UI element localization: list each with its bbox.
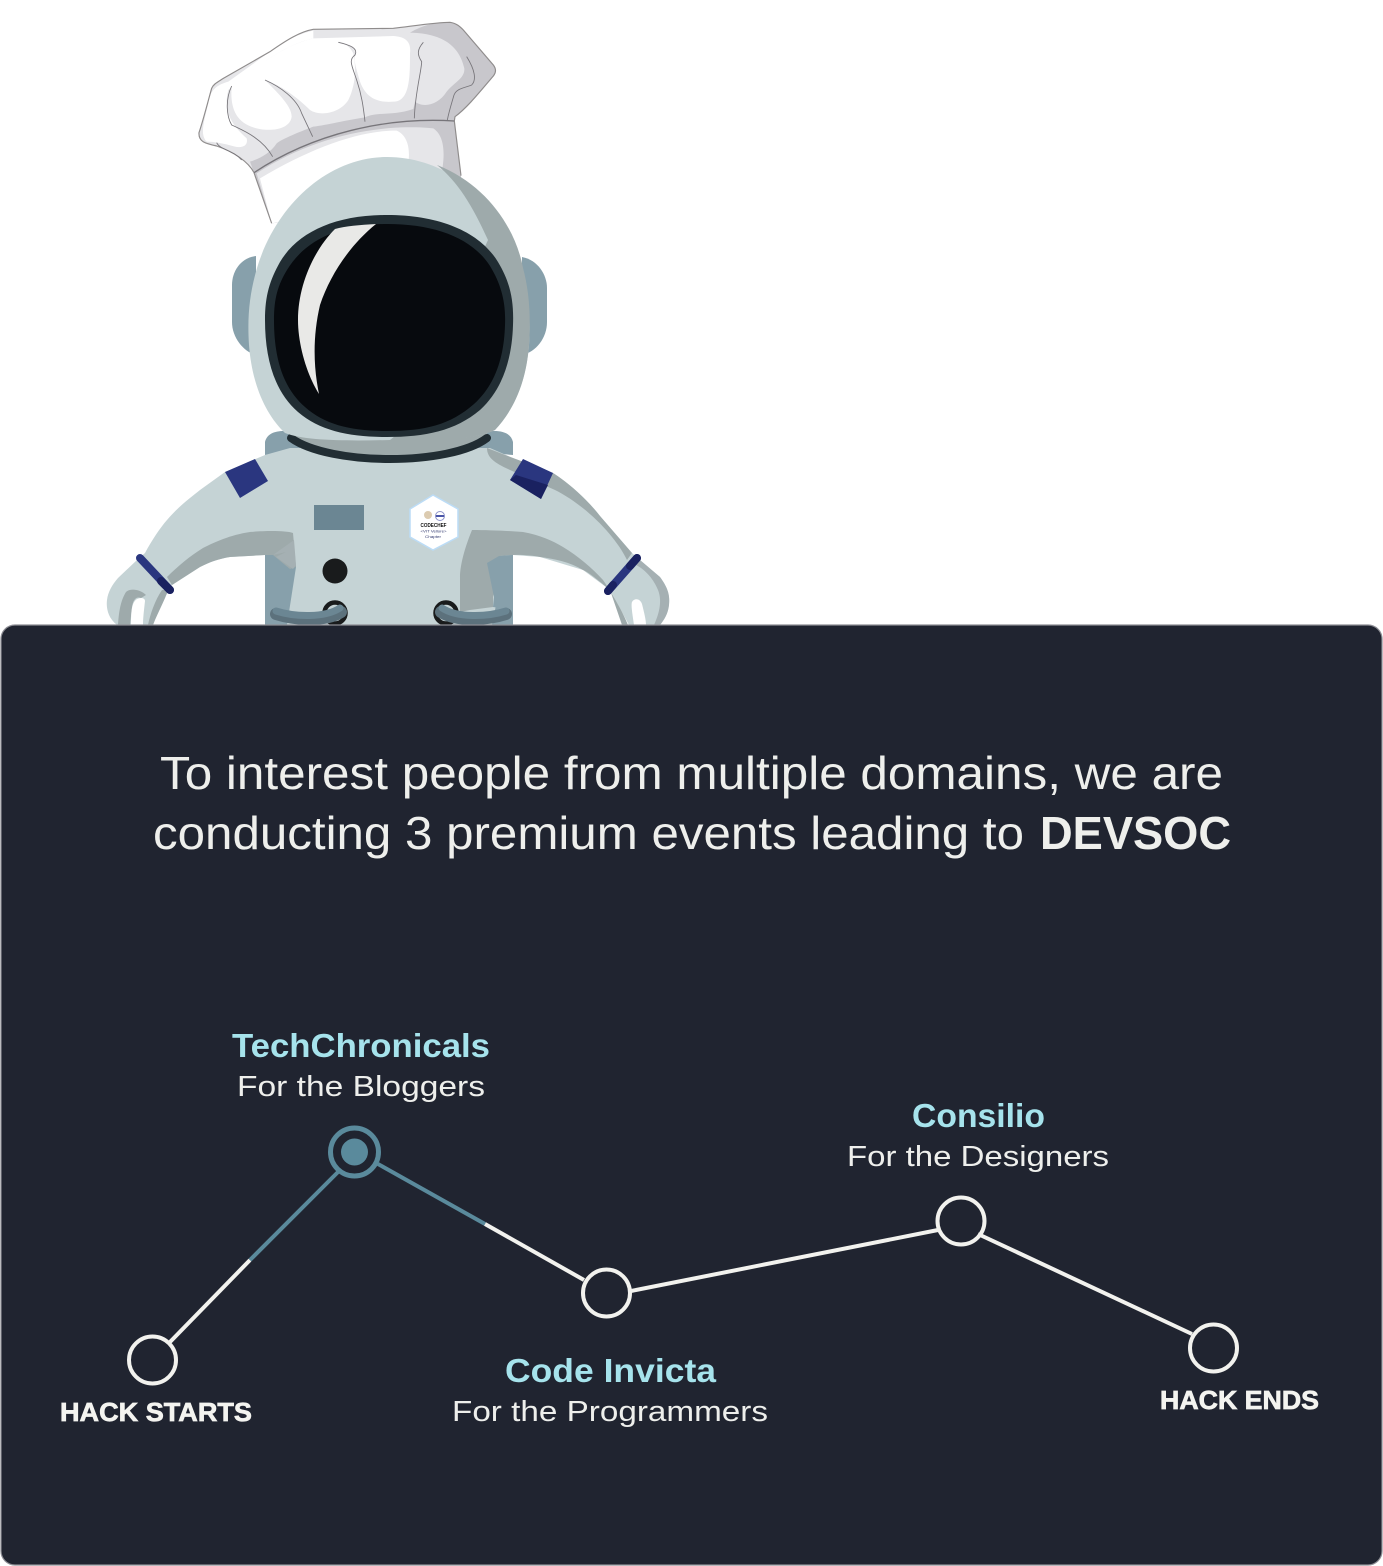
visor glass [274,224,505,431]
right arm shading [487,448,632,560]
label: Consilio: Consilio [912,1097,1045,1134]
label: Code Invicta [452,1352,768,1428]
marker: hack starts [129,1336,176,1384]
label: TechChronicals: For the Bloggers [237,1071,485,1103]
badge: CodeChef VIT Vellore chapter: CODECHEF [420,523,446,529]
right hand shading [636,560,669,625]
chest label rectangle [314,505,364,530]
badge: CodeChef VIT Vellore chapter: Chapter [425,534,442,539]
helmet shell [248,157,530,440]
chest button [322,558,348,584]
right underarm shading [460,530,628,625]
heading [153,747,1231,859]
left arm and torso [107,448,669,625]
torso side panel [265,431,513,625]
label: Code Invicta: For the Programmers [452,1396,768,1428]
label: hack starts: HACK STARTS [60,1397,252,1427]
heading: DEVSOC [1040,807,1231,859]
right suit ring [436,602,456,624]
badge: CodeChef VIT Vellore chapter: <VIT Vellore> [420,528,447,534]
timeline chart [129,1128,1237,1384]
marker: Consilio [938,1198,984,1244]
label: TechChronicals [232,1027,490,1103]
right torso fold [487,555,513,610]
helmet shading [390,165,530,440]
left hand shading [118,590,168,625]
label: hack ends: HACK ENDS [1160,1385,1319,1415]
icon: shoulder patch right [510,459,553,499]
icon: chef hat [199,22,496,223]
heading: To interest people from multiple domains, we are [160,747,1223,799]
icon: left wrist cuff [140,558,170,590]
right suit hose [441,608,506,619]
icon: shoulder patch left [225,459,268,498]
left hip fold [273,540,296,569]
icon: right wrist cuff [608,558,637,591]
marker: TechChronicals active [330,1128,378,1176]
collar [291,430,487,459]
label: Consilio: For the Designers [847,1141,1109,1173]
badge: CodeChef VIT Vellore chapter [410,495,458,550]
icon: helmet ears [232,256,547,355]
label: Code Invicta: Code Invicta [505,1352,717,1389]
marker: Code Invicta [583,1270,630,1316]
marker: hack ends [1190,1324,1237,1372]
left suit ring [324,602,346,624]
left suit hose [276,608,341,619]
label: TechChronicals: TechChronicals [232,1027,490,1064]
heading: conducting 3 premium events leading to [153,807,1024,859]
left hand slot [131,598,145,625]
visor rim [265,215,513,437]
right hand slot [632,599,646,625]
illustration: astronaut chef [107,22,669,625]
visor highlight [298,224,376,394]
left underarm shading [167,531,296,585]
panel: timeline card [1,625,1382,1565]
label: Consilio [847,1097,1109,1173]
